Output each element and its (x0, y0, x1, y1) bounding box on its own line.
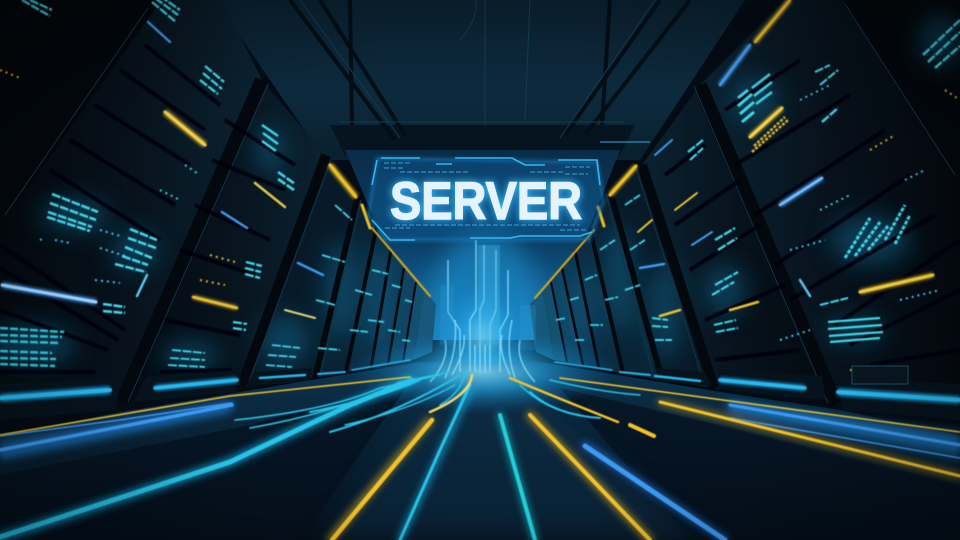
LED rows right (556, 20, 960, 342)
rack pillars right (551, 0, 960, 405)
rack slats left (0, 45, 295, 372)
glowing floor light trails (0, 372, 960, 540)
yellow and blue glow left (0, 112, 356, 398)
blue trails (0, 403, 960, 540)
trail glow layer (0, 380, 960, 540)
small unit bottom right (852, 366, 908, 384)
central light glow (347, 275, 617, 414)
yellow and blue glow right (610, 0, 960, 400)
yellow trails (0, 377, 960, 540)
panel frame lines (372, 158, 600, 240)
status dots left (0, 70, 235, 285)
title: SERVER (390, 172, 582, 231)
rack slats right (665, 60, 960, 365)
rack cluster glow left (0, 125, 394, 369)
rack base right (655, 368, 960, 420)
floor (0, 362, 960, 540)
right rack lights (535, 0, 960, 400)
circuit traces rising from floor (430, 240, 536, 382)
LED rows left (0, 0, 412, 367)
left server racks (0, 0, 436, 420)
status dots right (780, 85, 960, 372)
title glow: SERVER (390, 172, 582, 231)
ceiling (215, 0, 745, 160)
rack base left (0, 368, 312, 420)
panel data texture (384, 163, 590, 230)
cyan trails left (0, 372, 640, 540)
holographic sign panel (368, 158, 604, 240)
right server racks (530, 0, 960, 420)
corridor backdrop (345, 150, 620, 390)
rack pillars left (0, 0, 416, 402)
left rack lights (0, 0, 430, 398)
rack cluster glow right (568, 15, 960, 360)
